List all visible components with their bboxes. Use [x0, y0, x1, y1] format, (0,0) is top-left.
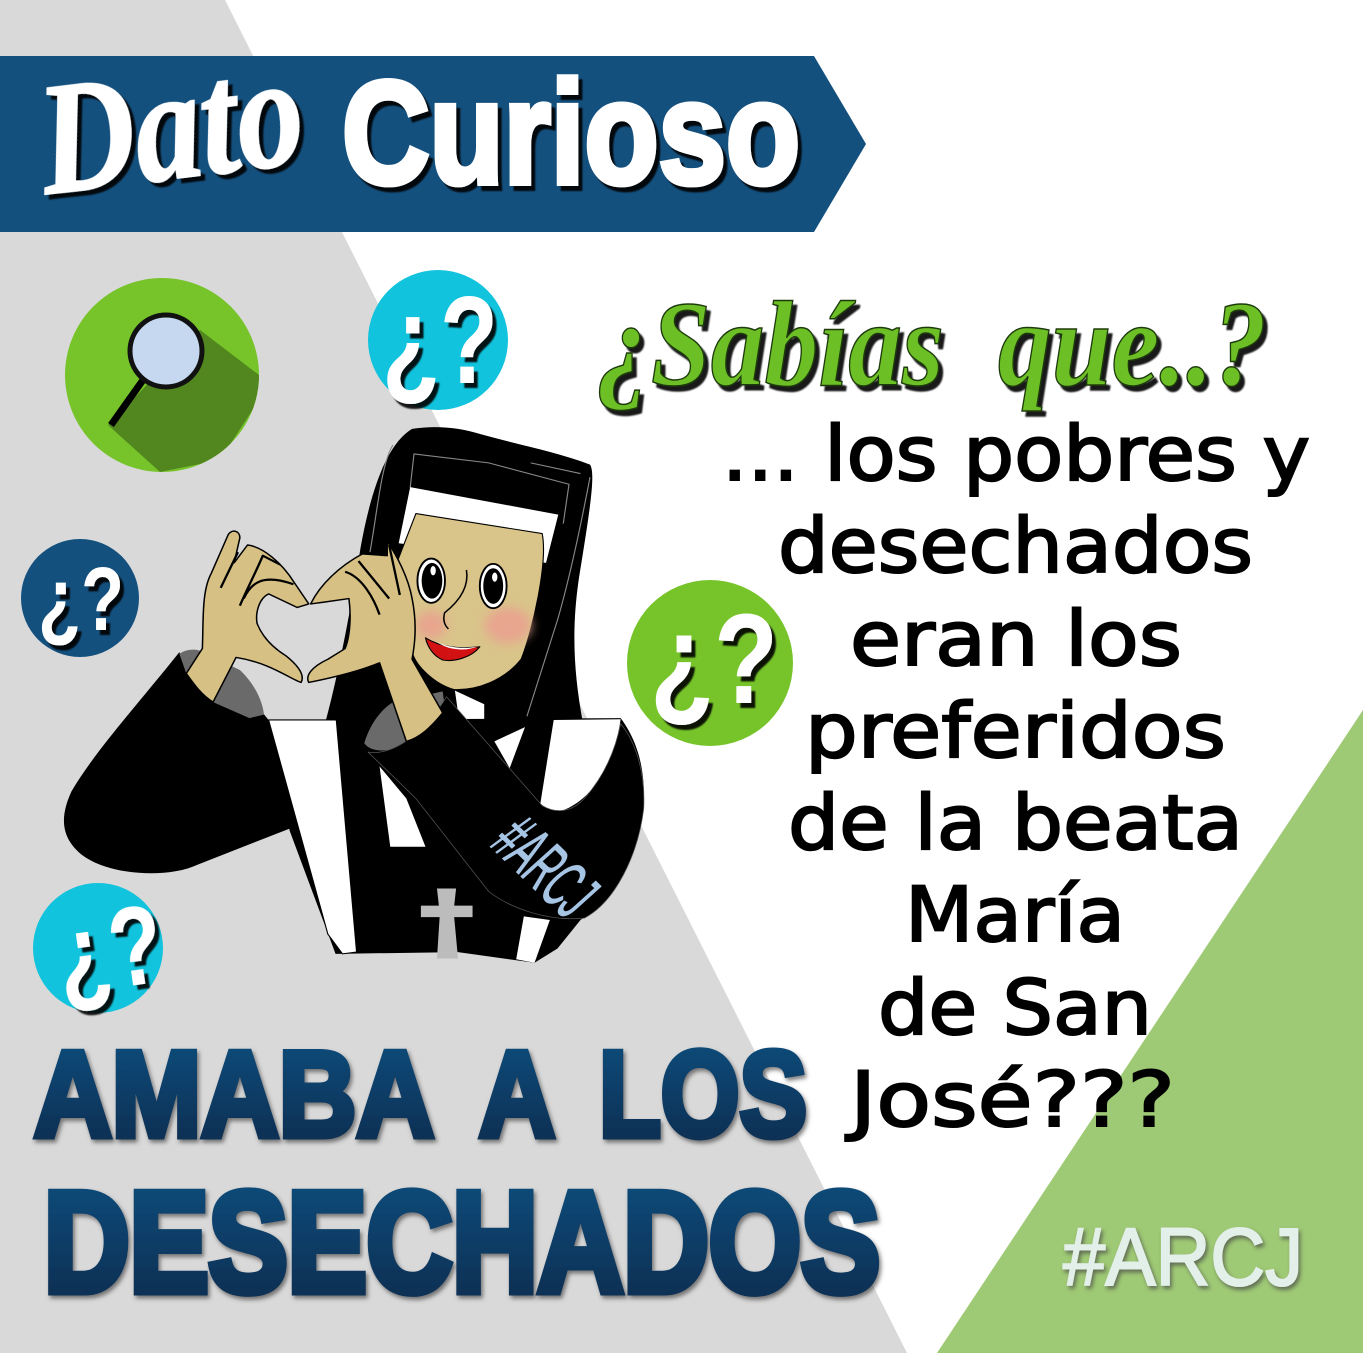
left hand: [186, 531, 309, 702]
title: Amaba a los: A: [479, 1026, 555, 1162]
body text: eran los: [850, 594, 1182, 683]
body text: [722, 409, 1310, 1144]
icon: magnifying glass: [65, 278, 259, 472]
icon: cyan question marks bottom: ¿?: [48, 881, 171, 1019]
body text: desechados: [778, 501, 1253, 590]
body text: ... los pobres y: [722, 409, 1310, 498]
collar: [454, 690, 485, 731]
hashtag logo: #ARCJ: [1063, 1212, 1303, 1303]
left sleeve: [64, 652, 293, 873]
mouth: [425, 638, 480, 660]
central white panel: [380, 766, 425, 847]
illustration: nun making heart with hands: [64, 427, 644, 963]
right cuff: [364, 691, 445, 751]
title: Desechados: DESECHADOS: [44, 1163, 880, 1322]
left white scapular panel: [269, 720, 357, 954]
cross: [421, 889, 473, 959]
cheek blush: [485, 607, 531, 643]
right hand: [308, 541, 443, 741]
banner text: Curioso: Curioso: [342, 51, 800, 214]
body text: José???: [845, 1055, 1175, 1144]
icon: cyan question marks top: ¿?: [382, 272, 498, 410]
heading: Sabías que: ¿Sabías que..?: [597, 277, 1267, 412]
right white scapular panel: [540, 719, 621, 811]
finger creases: [221, 545, 400, 615]
background: green corner triangle: [937, 710, 1363, 1353]
teeth: [437, 642, 477, 649]
icon: navy question marks: ¿?: [38, 550, 124, 650]
cheek blush left: [416, 611, 447, 640]
background: grey diagonal panel: [0, 0, 907, 1353]
sash hashtag: #ARCJ: [477, 802, 615, 931]
habit torso: [269, 718, 644, 963]
body text: María: [905, 870, 1125, 959]
icon: navy question marks: [21, 539, 139, 657]
centre white strip: [494, 727, 525, 768]
white coif band: [399, 487, 558, 563]
title: Amaba a los: AMABA: [34, 1026, 434, 1162]
body text: de San: [878, 963, 1152, 1052]
banner: Dato Curioso: [0, 20, 866, 232]
nun veil: [326, 427, 592, 720]
title: Amaba a los: [34, 1026, 807, 1162]
eyes: [417, 559, 507, 608]
nose: [444, 570, 467, 629]
icon: green question marks: [627, 580, 793, 746]
body text: de la beata: [788, 778, 1243, 867]
title: Amaba a los: LOS: [599, 1026, 807, 1162]
right sleeve sash: [368, 697, 644, 919]
banner text: Dato: Dato: [27, 20, 312, 229]
lower right white strip: [516, 916, 550, 963]
icon: green question marks: ¿?: [650, 588, 778, 731]
left cuff: [179, 650, 264, 718]
face: [397, 514, 543, 690]
veil highlight lines: [370, 445, 590, 716]
body text: preferidos: [805, 686, 1226, 775]
